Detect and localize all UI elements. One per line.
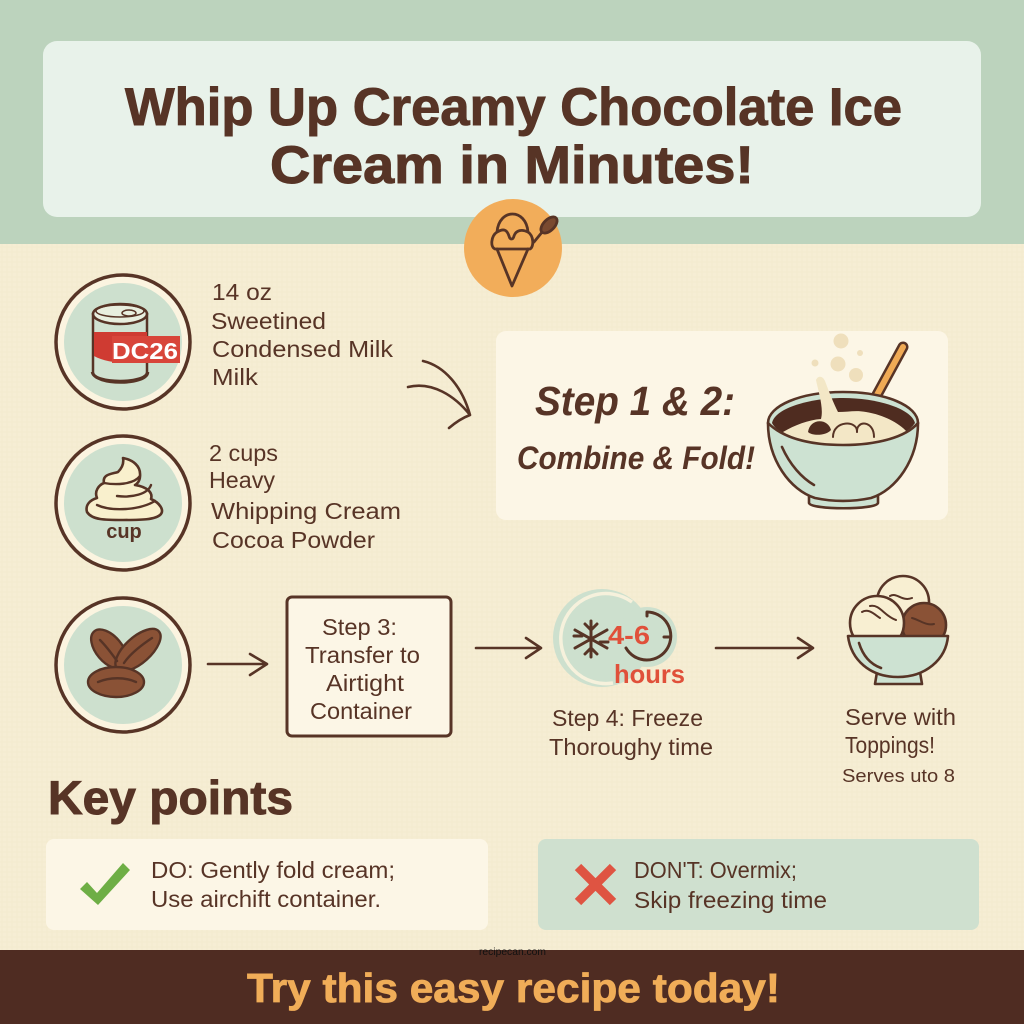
do text — [151, 857, 395, 912]
panel: don't — [538, 839, 979, 930]
panel: step 3: Airtight — [326, 670, 405, 696]
ingredient text: whipping cream and cocoa: Whipping Cream — [211, 498, 401, 524]
ingredient text: condensed milk: 14 oz — [212, 279, 272, 305]
serve text: Serves uto 8 — [842, 765, 955, 786]
title: Whip Up Creamy Chocolate Ice — [125, 78, 902, 137]
ingredient text: condensed milk — [211, 279, 393, 390]
serve text: Serve with — [845, 704, 956, 730]
call to action: Try this easy recipe today! — [247, 965, 780, 1011]
do text: DO: Gently fold cream; — [151, 857, 395, 883]
ingredient text: whipping cream and cocoa — [209, 440, 401, 553]
title — [125, 78, 902, 195]
icon: mixing bowl with spoon — [768, 334, 918, 508]
panel: step 3: Transfer to — [305, 642, 420, 668]
arrow: step 3 to step 4 — [476, 638, 541, 658]
panel: step 3: Container — [310, 698, 412, 724]
icon: check mark — [80, 863, 130, 905]
panel: step 1 and 2 — [496, 331, 948, 520]
panel: step 3 — [287, 597, 451, 736]
icon: ice cream cone and whisk — [464, 199, 562, 297]
serve text: Toppings! — [845, 732, 935, 758]
ingredient text: whipping cream and cocoa: 2 cups — [209, 440, 278, 466]
duration label: hours — [614, 659, 685, 689]
duration label: 4-6 — [608, 620, 650, 650]
don't text — [634, 857, 827, 913]
heading: key points: Key points — [48, 771, 293, 824]
icon: whipped cream cup — [56, 436, 190, 570]
ingredient text: condensed milk: Sweetined — [211, 308, 326, 334]
arrow: ingredients to combine — [408, 361, 470, 428]
source credit: recipecan.com — [479, 947, 546, 958]
ingredient text: condensed milk: Condensed Milk — [212, 336, 393, 362]
cup label: cup — [106, 521, 142, 543]
ingredient text: condensed milk: Milk — [212, 364, 258, 390]
title: Cream in Minutes! — [270, 136, 754, 195]
step heading: Step 1 & 2: — [535, 378, 735, 424]
icon: cocoa beans — [56, 598, 190, 732]
panel: step 3: Step 3: — [322, 614, 397, 640]
step 4 text: Step 4: Freeze — [552, 705, 703, 731]
arrow: step 4 to serve — [716, 638, 813, 658]
title panel — [43, 41, 981, 217]
don't text: Skip freezing time — [634, 887, 827, 913]
duration label — [608, 620, 685, 689]
serve text — [842, 704, 956, 786]
arrow: cocoa to step 3 — [208, 654, 267, 675]
step heading: Combine & Fold! — [517, 440, 755, 476]
icon: cross mark — [578, 867, 613, 902]
icon: condensed milk can — [56, 275, 190, 409]
don't text: DON'T: Overmix; — [634, 857, 797, 883]
step heading — [517, 378, 755, 476]
ingredient text: whipping cream and cocoa: Heavy — [209, 467, 275, 493]
do text: Use airchift container. — [151, 886, 381, 912]
icon: freezer timer — [553, 589, 685, 689]
can label text: DC26 — [112, 338, 178, 364]
panel: do — [46, 839, 488, 930]
icon: ice cream bowl — [848, 576, 948, 684]
ingredient text: whipping cream and cocoa: Cocoa Powder — [212, 527, 375, 553]
step 4 text — [549, 705, 713, 760]
footer banner — [0, 950, 1024, 1024]
step 4 text: Thoroughy time — [549, 734, 713, 760]
